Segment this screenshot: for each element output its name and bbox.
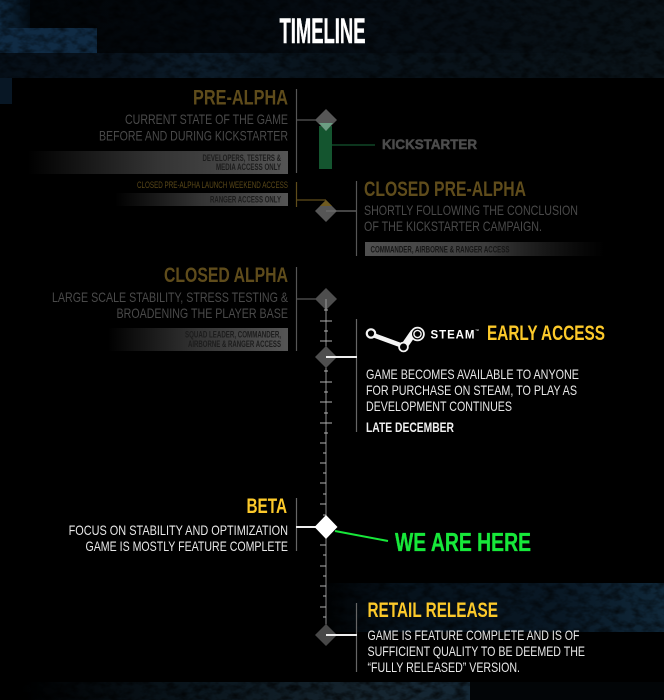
steam wordmark: ™ xyxy=(475,328,479,333)
access bar xyxy=(28,151,288,174)
current stage diamond marker xyxy=(314,515,338,539)
connector xyxy=(326,634,357,636)
description: SUFFICIENT QUALITY TO BE DEEMED THE xyxy=(368,643,585,659)
description xyxy=(364,202,578,234)
description: BROADENING THE PLAYER BASE xyxy=(116,305,288,321)
description xyxy=(99,111,288,144)
connector xyxy=(326,356,357,358)
date: LATE DECEMBER xyxy=(366,419,454,435)
description: SHORTLY FOLLOWING THE CONCLUSION xyxy=(364,202,578,218)
kickstarter label: KICKSTARTER xyxy=(382,137,477,152)
heading: pre-alpha: PRE-ALPHA xyxy=(193,86,288,110)
kickstarter connector xyxy=(332,144,375,146)
description: BEFORE AND DURING KICKSTARTER xyxy=(99,128,288,144)
heading: closed pre-alpha: CLOSED PRE-ALPHA xyxy=(364,178,526,201)
connector xyxy=(296,526,316,528)
divider line xyxy=(356,319,358,432)
panel: closed alpha xyxy=(52,264,326,351)
stage bracket xyxy=(296,267,326,351)
icon: steam logo xyxy=(367,328,424,351)
description: GAME IS MOSTLY FEATURE COMPLETE xyxy=(86,538,288,554)
description: “FULLY RELEASED” VERSION. xyxy=(368,659,520,675)
access bar xyxy=(108,328,288,351)
gold bracket xyxy=(296,182,326,207)
divider line xyxy=(356,603,358,672)
description: DEVELOPMENT CONTINUES xyxy=(366,398,512,414)
panel: pre-alpha xyxy=(28,86,316,174)
panel: closed pre-alpha launch weekend xyxy=(115,180,326,207)
description: OF THE KICKSTARTER CAMPAIGN. xyxy=(364,218,542,234)
heading: beta: BETA xyxy=(246,495,287,518)
timeline axis with ticks xyxy=(320,299,332,635)
access bar: AIRBORNE & RANGER ACCESS xyxy=(188,339,281,350)
description xyxy=(69,522,288,554)
we are here label: WE ARE HERE xyxy=(395,527,531,557)
access bar: DEVELOPERS, TESTERS & xyxy=(202,153,281,164)
description xyxy=(368,627,585,675)
access bar: RANGER ACCESS ONLY xyxy=(210,194,281,206)
kickstarter period bar xyxy=(319,126,332,169)
access bar: MEDIA ACCESS ONLY xyxy=(216,162,281,173)
heading: early access: EARLY ACCESS xyxy=(487,322,605,345)
description: CURRENT STATE OF THE GAME xyxy=(125,111,288,127)
pre-alpha diamond marker xyxy=(315,109,337,131)
steam wordmark: STEAM xyxy=(430,329,474,341)
early access diamond marker xyxy=(315,346,337,368)
description: GAME IS FEATURE COMPLETE AND IS OF xyxy=(368,627,580,643)
heading: closed alpha: CLOSED ALPHA xyxy=(164,264,288,287)
access bar: COMMANDER, AIRBORNE & RANGER ACCESS xyxy=(370,244,510,256)
description: LARGE SCALE STABILITY, STRESS TESTING & xyxy=(52,289,289,305)
retail release diamond marker xyxy=(315,624,337,646)
panel: beta xyxy=(69,495,316,554)
panel: early access xyxy=(326,319,605,435)
title: TIMELINE xyxy=(280,12,366,51)
closed pre-alpha diamond marker xyxy=(315,200,356,222)
we are here arrow line xyxy=(335,531,388,541)
launch weekend label: CLOSED PRE-ALPHA LAUNCH WEEKEND ACCESS xyxy=(137,180,288,191)
panel: closed pre-alpha xyxy=(356,178,605,256)
stage bracket xyxy=(296,498,298,551)
panel: retail release xyxy=(326,599,585,675)
description xyxy=(366,366,579,414)
description: FOR PURCHASE ON STEAM, TO PLAY AS xyxy=(366,382,577,398)
divider line xyxy=(356,181,358,256)
access bar: SQUAD LEADER, COMMANDER, xyxy=(185,330,281,340)
description xyxy=(52,289,289,321)
heading: retail release: RETAIL RELEASE xyxy=(368,599,498,622)
description: GAME BECOMES AVAILABLE TO ANYONE xyxy=(366,366,579,382)
closed alpha diamond marker xyxy=(315,288,337,310)
stage bracket xyxy=(296,89,316,173)
access bar xyxy=(115,193,288,206)
description: FOCUS ON STABILITY AND OPTIMIZATION xyxy=(69,522,288,538)
